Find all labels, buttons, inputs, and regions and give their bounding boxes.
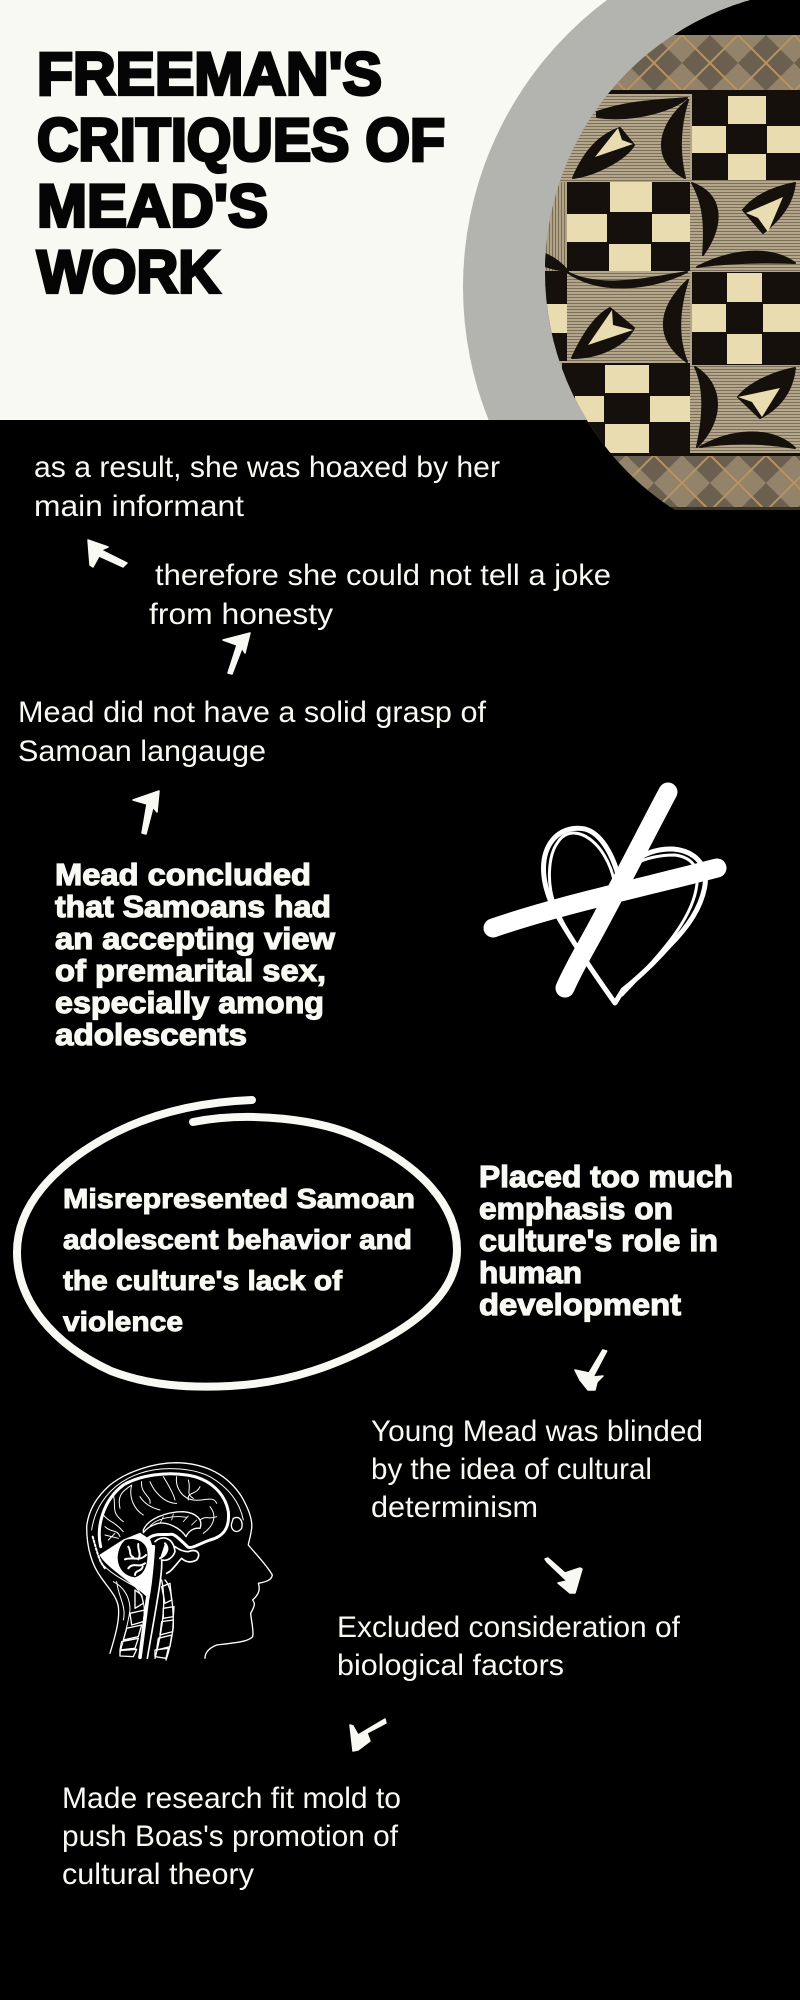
image: Samoan tapa cloth in a circle bbox=[540, 0, 800, 555]
bold text inside oval: the culture's lack of bbox=[63, 1265, 343, 1296]
text: could not tell a joke: from honesty bbox=[149, 598, 333, 631]
bold text: Mead concluded: that Samoans had bbox=[55, 889, 331, 924]
text: hoaxed by informant bbox=[34, 451, 500, 523]
bold text: Mead concluded: an accepting view bbox=[55, 921, 336, 956]
title: FREEMAN'S bbox=[37, 40, 382, 108]
text: cultural determinism: by the idea of cultural bbox=[371, 1453, 652, 1486]
header background bbox=[0, 0, 800, 420]
arrow: down bbox=[575, 1350, 607, 1390]
text: biological factors bbox=[337, 1611, 681, 1682]
leaf and crescent motifs bbox=[545, 98, 795, 448]
bold text: Mead concluded: Mead concluded bbox=[55, 857, 311, 892]
text: could not tell a joke bbox=[149, 559, 611, 631]
text: cultural determinism: Young Mead was blinded bbox=[371, 1415, 703, 1448]
arrow: up-right bbox=[223, 633, 250, 674]
bold text: Mead concluded: adolescents bbox=[55, 1017, 247, 1052]
checker blocks bbox=[545, 94, 800, 453]
text: hoaxed by informant: main informant bbox=[34, 490, 245, 523]
icon: crossed-out heart bbox=[493, 792, 717, 1003]
title: MEAD'S bbox=[37, 172, 268, 240]
bold text: Mead concluded: especially among bbox=[55, 985, 324, 1020]
text: grasp of Samoan language bbox=[18, 696, 487, 768]
text: biological factors: biological factors bbox=[337, 1649, 564, 1682]
text: Boas's cultural theory: cultural theory bbox=[62, 1858, 254, 1891]
bold text: culture emphasis: development bbox=[479, 1287, 681, 1322]
grey circle behind artwork bbox=[463, 0, 800, 645]
icon: head and brain cross-section bbox=[87, 1463, 272, 1660]
bold text inside oval: Misrepresented Samoan bbox=[63, 1183, 415, 1214]
arrow: up-right bbox=[133, 791, 159, 834]
title: CRITIQUES OF bbox=[37, 106, 445, 174]
bold text: culture emphasis: emphasis on bbox=[479, 1191, 673, 1226]
bold text inside oval: adolescent behavior and bbox=[63, 1224, 412, 1255]
arrow: down-right bbox=[545, 1558, 582, 1593]
text: biological factors: Excluded consideration of bbox=[337, 1611, 681, 1644]
text: grasp of Samoan language: Samoan langauge bbox=[18, 735, 266, 768]
text: Boas's cultural theory: push Boas's promotion of bbox=[62, 1820, 399, 1853]
text: Boas's cultural theory: Made research fit mold to bbox=[62, 1782, 401, 1815]
bold text: culture emphasis: human bbox=[479, 1255, 582, 1290]
bold text: culture emphasis: Placed too much bbox=[479, 1159, 733, 1194]
title: WORK bbox=[37, 238, 220, 306]
arrow: down-left bbox=[350, 1719, 386, 1751]
text: Boas's cultural theory bbox=[62, 1782, 401, 1891]
hand-drawn oval bbox=[17, 1100, 457, 1387]
bold text inside oval: violence bbox=[63, 1306, 183, 1337]
bold text inside oval bbox=[63, 1183, 415, 1337]
bold text: culture emphasis: culture's role in bbox=[479, 1223, 718, 1258]
text: cultural determinism bbox=[371, 1415, 703, 1524]
text: hoaxed by informant: as a result, she was hoaxed by her bbox=[34, 451, 500, 484]
black lower panel bbox=[0, 420, 800, 2000]
bold text: culture emphasis bbox=[479, 1159, 733, 1322]
text: could not tell a joke: therefore she could not tell a joke bbox=[155, 559, 611, 592]
text: cultural determinism: determinism bbox=[371, 1491, 538, 1524]
text: grasp of Samoan language: Mead did not have a solid grasp of bbox=[18, 696, 487, 729]
bold text: Mead concluded bbox=[55, 857, 336, 1052]
title bbox=[37, 40, 445, 306]
bold text: Mead concluded: of premarital sex, bbox=[55, 953, 326, 988]
arrow: up-left bbox=[88, 540, 127, 567]
